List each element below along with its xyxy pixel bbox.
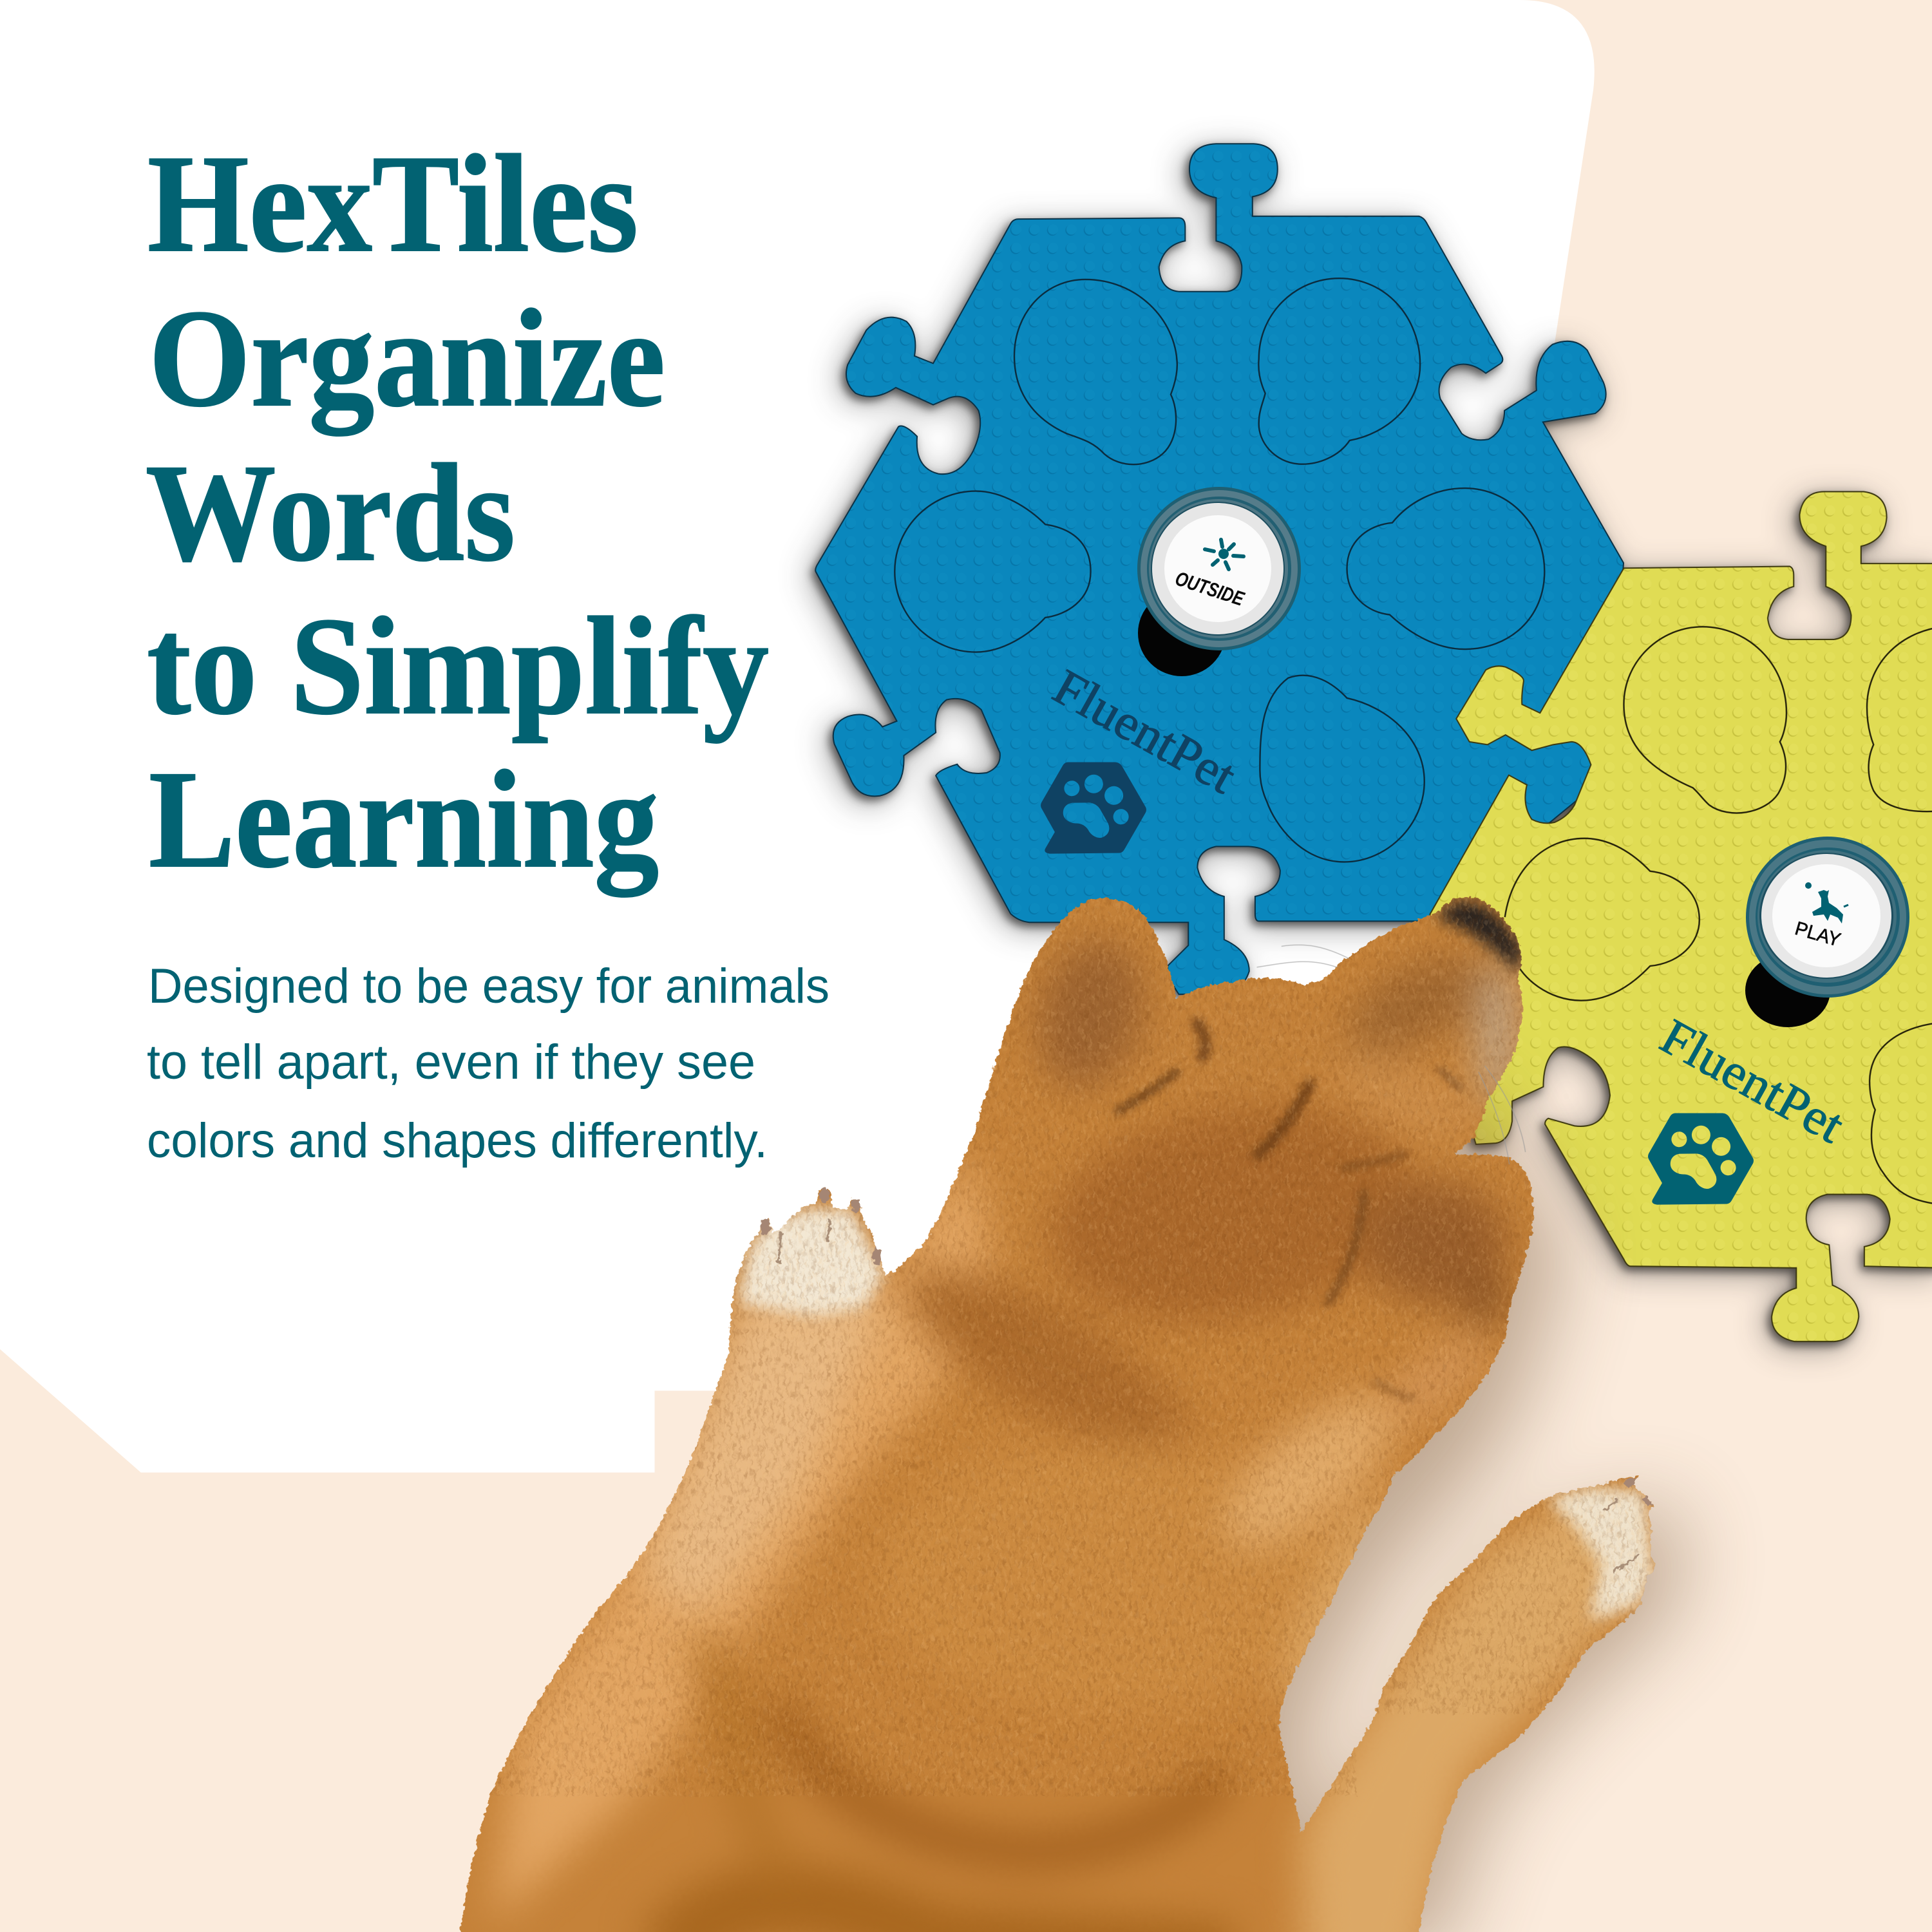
title: Organize xyxy=(149,281,665,436)
icon: sun xyxy=(1205,540,1244,569)
dog body with fur xyxy=(419,862,1700,1932)
head fur folds xyxy=(1117,1023,1460,1399)
description text xyxy=(147,959,829,1168)
yellow tile button slots xyxy=(1505,627,1932,1205)
dog cast shadow xyxy=(1013,1082,1681,1932)
toe claws xyxy=(760,1186,1656,1507)
base coat xyxy=(419,862,1700,1932)
yellow tile FluentPet wordmark: FluentPet xyxy=(1652,1008,1853,1153)
nose xyxy=(1435,900,1523,973)
label: play: PLAY xyxy=(1792,918,1843,951)
icon: jumping dog and ball xyxy=(1805,882,1848,923)
blue hex tile xyxy=(815,144,1624,994)
white hexagonal panel xyxy=(0,0,1595,1604)
whiskers xyxy=(1257,945,1526,1164)
title xyxy=(146,126,769,897)
button: play xyxy=(1746,837,1909,998)
blue tile button slots xyxy=(895,278,1544,862)
description text: to tell apart, even if they see xyxy=(147,1035,755,1090)
title: Learning xyxy=(149,742,659,897)
blue tile FluentPet wordmark: FluentPet xyxy=(1045,658,1245,804)
cream paws xyxy=(739,1208,1654,1620)
fur strands xyxy=(419,862,1700,1932)
toe lines xyxy=(779,1220,1639,1571)
label: outside: OUTSIDE xyxy=(1173,567,1247,611)
title: Words xyxy=(146,435,515,590)
title: HexTiles xyxy=(147,126,638,281)
icon: FluentPet corner logo xyxy=(1687,1671,1782,1784)
dog illustration xyxy=(419,862,1700,1932)
description text: colors and shapes differently. xyxy=(147,1113,768,1168)
yellow tile button hole xyxy=(1745,954,1830,1027)
description text: Designed to be easy for animals xyxy=(148,959,829,1014)
coat shading xyxy=(493,925,1657,1932)
rear shadow band xyxy=(665,1639,1232,1932)
icon: blue tile paw logo xyxy=(1021,739,1160,886)
title: to Simplify xyxy=(147,589,769,743)
hex tiles xyxy=(815,144,1932,1341)
blue tile button hole xyxy=(1138,590,1226,676)
icon: yellow tile paw logo xyxy=(1628,1090,1768,1236)
yellow hex tile xyxy=(1430,491,1932,1341)
button: outside xyxy=(1137,487,1301,650)
